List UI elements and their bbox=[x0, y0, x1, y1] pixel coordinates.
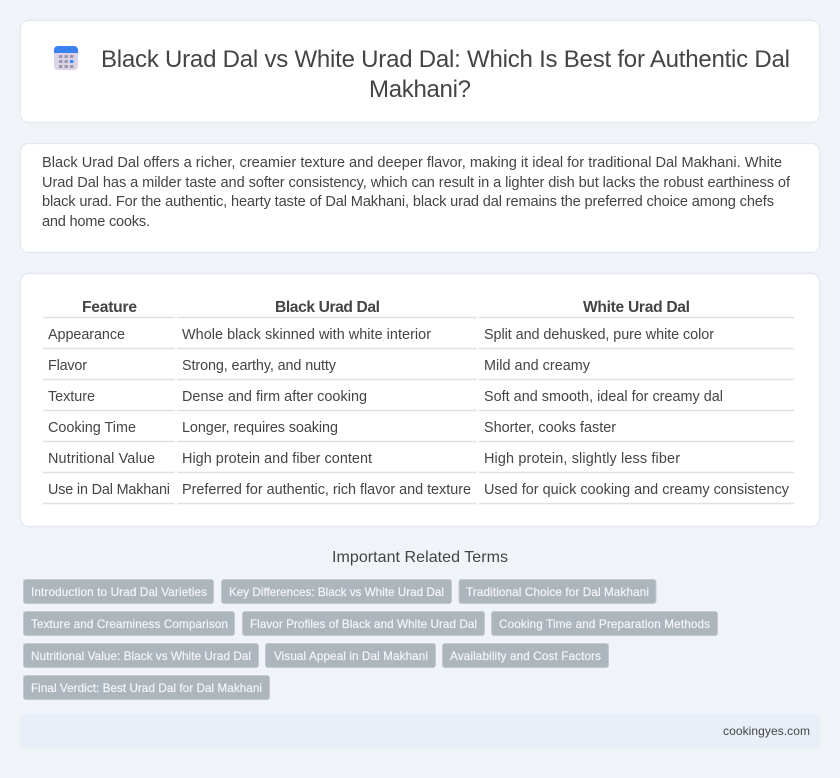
row: flavor: Flavor bbox=[48, 358, 87, 374]
row: texture: Dense and firm after cooking bbox=[182, 389, 367, 405]
heading: related terms: Important Related Terms bbox=[332, 549, 508, 566]
row: nutritional value: High protein, slightly less fiber bbox=[484, 451, 680, 467]
footer bbox=[20, 714, 820, 748]
title bbox=[101, 46, 790, 103]
text block: introduction: and home cooks. bbox=[42, 214, 150, 230]
row: cooking time bbox=[43, 420, 794, 442]
row: texture bbox=[43, 389, 794, 410]
panel: comparison table bbox=[20, 274, 820, 526]
tag: Availability and Cost Factors bbox=[450, 650, 601, 663]
table header bbox=[43, 299, 794, 318]
row: nutritional value bbox=[43, 451, 794, 472]
table header: White Urad Dal bbox=[583, 299, 690, 316]
tag bbox=[492, 612, 718, 636]
panel: header bbox=[20, 20, 820, 122]
tag bbox=[24, 612, 234, 636]
related term tags bbox=[24, 580, 718, 700]
row: use in dal makhani: Use in Dal Makhani bbox=[48, 482, 170, 498]
tag bbox=[24, 676, 270, 700]
tag: Visual Appeal in Dal Makhani bbox=[274, 650, 428, 663]
tag: Key Differences: Black vs White Urad Dal bbox=[229, 586, 444, 599]
row: appearance: Split and dehusked, pure white color bbox=[484, 327, 714, 343]
tag bbox=[24, 644, 258, 668]
text block: introduction: Urad Dal has a milder taste and softer consistency, which can result in a lighter dish but lacks the robust earthiness of bbox=[42, 175, 791, 191]
tag: Cooking Time and Preparation Methods bbox=[499, 618, 710, 631]
row: nutritional value: High protein and fiber content bbox=[182, 451, 372, 467]
table header: Feature bbox=[82, 299, 137, 316]
row: flavor: Strong, earthy, and nutty bbox=[182, 358, 337, 374]
row: use in dal makhani: Used for quick cooking and creamy consistency bbox=[484, 482, 790, 498]
icon: calendar bbox=[54, 46, 78, 70]
tag bbox=[242, 612, 484, 636]
row: flavor bbox=[43, 358, 794, 380]
tag: Nutritional Value: Black vs White Urad Dal bbox=[31, 650, 251, 663]
row: cooking time: Cooking Time bbox=[48, 420, 136, 436]
row: texture: Soft and smooth, ideal for creamy dal bbox=[484, 389, 723, 405]
title: Black Urad Dal vs White Urad Dal: Which Is Best for Authentic Dal bbox=[101, 46, 790, 73]
row: cooking time: Shorter, cooks faster bbox=[484, 420, 616, 436]
text block: introduction: Black Urad Dal offers a richer, creamier texture and deeper flavor, making it ideal for traditional Dal Makhani. White bbox=[42, 155, 782, 171]
row: use in dal makhani: Preferred for authentic, rich flavor and texture bbox=[182, 482, 471, 498]
tag bbox=[442, 644, 608, 668]
title: Makhani? bbox=[369, 76, 471, 103]
row: cooking time: Longer, requires soaking bbox=[182, 420, 338, 436]
text block: introduction: black urad. For the authentic, hearty taste of Dal Makhani, black urad dal remains the preferred choice among chefs bbox=[42, 194, 774, 210]
tag bbox=[459, 580, 656, 604]
row: nutritional value: Nutritional Value bbox=[48, 451, 155, 467]
row: appearance bbox=[43, 327, 794, 348]
row: appearance: Appearance bbox=[48, 327, 125, 343]
tag: Traditional Choice for Dal Makhani bbox=[466, 586, 649, 599]
row: use in dal makhani bbox=[43, 482, 794, 504]
tag: Final Verdict: Best Urad Dal for Dal Makhani bbox=[31, 682, 262, 695]
tag: Texture and Creaminess Comparison bbox=[31, 618, 228, 631]
tag bbox=[222, 580, 452, 604]
panel: introduction bbox=[20, 144, 820, 252]
tag: Introduction to Urad Dal Varieties bbox=[31, 586, 207, 599]
footer: cookingyes.com bbox=[723, 724, 810, 738]
row: texture: Texture bbox=[48, 389, 95, 405]
table header: Black Urad Dal bbox=[275, 299, 380, 316]
text block: introduction bbox=[42, 155, 791, 230]
tag: Flavor Profiles of Black and White Urad Dal bbox=[250, 618, 477, 631]
row: appearance: Whole black skinned with white interior bbox=[182, 327, 431, 343]
tag bbox=[24, 580, 214, 604]
tag bbox=[266, 644, 436, 668]
row: flavor: Mild and creamy bbox=[484, 358, 591, 374]
